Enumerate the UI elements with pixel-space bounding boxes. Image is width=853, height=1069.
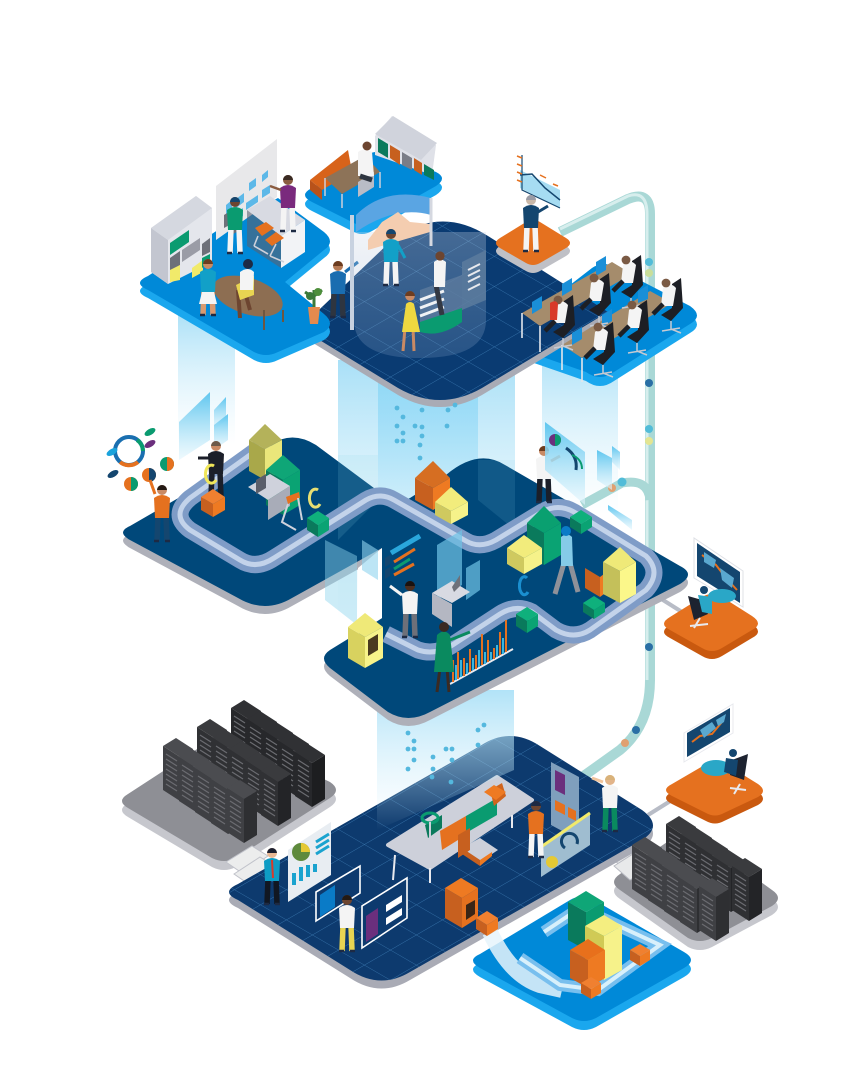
- platform: right desks: [501, 264, 697, 386]
- round meeting table: [208, 268, 288, 330]
- person: man in purple: [270, 175, 296, 231]
- person: woman teal: [199, 259, 217, 315]
- chart board with man in suit: [288, 822, 331, 902]
- data dots bottom pillar: [406, 723, 486, 784]
- server racks right, back row: [666, 816, 762, 921]
- translucent panel tones on middle platform: [325, 455, 515, 625]
- green crate with data ring: [307, 489, 329, 537]
- person: man in navy sweater: [523, 195, 548, 251]
- server racks right, front row: [632, 837, 729, 941]
- orange station top: [496, 220, 570, 273]
- orange crate with data ring: [201, 465, 225, 517]
- bookshelf top centre: [375, 116, 437, 180]
- high table with stools: [247, 196, 305, 268]
- person: orange shirt: [528, 801, 544, 857]
- conveyor belt: [180, 442, 654, 652]
- floating cards left: [179, 392, 228, 460]
- holo panel with text blocks: [420, 250, 486, 334]
- server platform right: [614, 833, 778, 950]
- platform: bottom right bright blue: [473, 896, 691, 1030]
- orange machine: [445, 878, 478, 928]
- table with orange fixtures: [388, 777, 532, 883]
- khaki and green tall boxes: [249, 424, 300, 515]
- small orange crate on ribbon: [476, 911, 498, 936]
- floating donut and pies: [105, 426, 174, 491]
- orange station bottom with world map: [666, 704, 763, 824]
- person: doctor in green coat: [434, 622, 470, 692]
- person: woman with dark skirt: [536, 446, 560, 502]
- person: man with yellow trousers: [339, 895, 355, 951]
- top navy platform: [300, 221, 608, 407]
- person: woman in orange: [150, 480, 170, 541]
- floating bars and workstation: [385, 536, 470, 627]
- orange and yellow boxes centre: [415, 461, 468, 524]
- tube: long data pipe on the right: [560, 195, 650, 780]
- person: man seated at sofa desk: [358, 142, 374, 180]
- stairs left: [226, 846, 284, 897]
- server platform left: [122, 735, 336, 870]
- pie on analytics card: [549, 434, 582, 470]
- platform: bottom navy: [229, 736, 653, 989]
- dashboard panels, centre right: [541, 762, 590, 877]
- server racks left, front row: [163, 738, 257, 843]
- person: white top at panel: [434, 251, 446, 315]
- person: teal in cylinder: [383, 229, 405, 285]
- pillars from top platform to middle: [178, 310, 618, 620]
- person: man in green: [227, 197, 243, 253]
- person: woman green trousers: [592, 775, 618, 831]
- platform: top left L: [140, 198, 330, 363]
- tube dots: [621, 258, 653, 747]
- ribbon conveyor on bottom right platform: [490, 908, 660, 990]
- person: woman in yellow dress: [402, 291, 420, 351]
- person: man in teal suit: [264, 848, 280, 904]
- pillar above bottom platform: [377, 690, 514, 830]
- person: woman seated: [236, 259, 254, 318]
- yellow machine: [348, 613, 383, 668]
- post-it wall: [216, 139, 277, 240]
- sofa and desk: [310, 150, 380, 208]
- orange station middle with world map: [664, 538, 758, 659]
- green and yellow stack: [507, 506, 561, 574]
- platform: middle S navy: [123, 438, 688, 726]
- orange and yellow boxes right: [585, 547, 636, 603]
- translucent cards centre: [437, 530, 480, 600]
- connector lines to orange stations: [648, 595, 682, 815]
- small green crate upper right: [570, 510, 592, 534]
- floating analytics cards right: [545, 422, 632, 530]
- line chart display: [517, 155, 560, 208]
- person: man in blue jacket: [330, 261, 358, 317]
- tube branch middle: [582, 478, 650, 505]
- plant in pot: [305, 288, 322, 324]
- platform: top centre blue: [305, 152, 442, 234]
- data dots upper pillar: [395, 403, 457, 460]
- stairs right: [608, 845, 654, 880]
- white gap beside the lower lobe: [358, 548, 382, 634]
- shelving unit left: [151, 196, 212, 284]
- desks and workers: [522, 255, 683, 382]
- bar chart with white frame: [450, 620, 513, 684]
- server racks left: [231, 700, 325, 807]
- small desk, laptop and stool: [248, 474, 302, 530]
- person: man white shirt: [390, 581, 418, 637]
- box stack bottom right: [568, 891, 650, 999]
- glass cylinder: [352, 194, 486, 358]
- person: man walking: [555, 526, 578, 594]
- server racks left, middle row: [197, 719, 291, 826]
- green crates lower: [516, 577, 605, 633]
- UI panels outlined: [316, 866, 407, 948]
- person: man in black suit: [198, 441, 224, 497]
